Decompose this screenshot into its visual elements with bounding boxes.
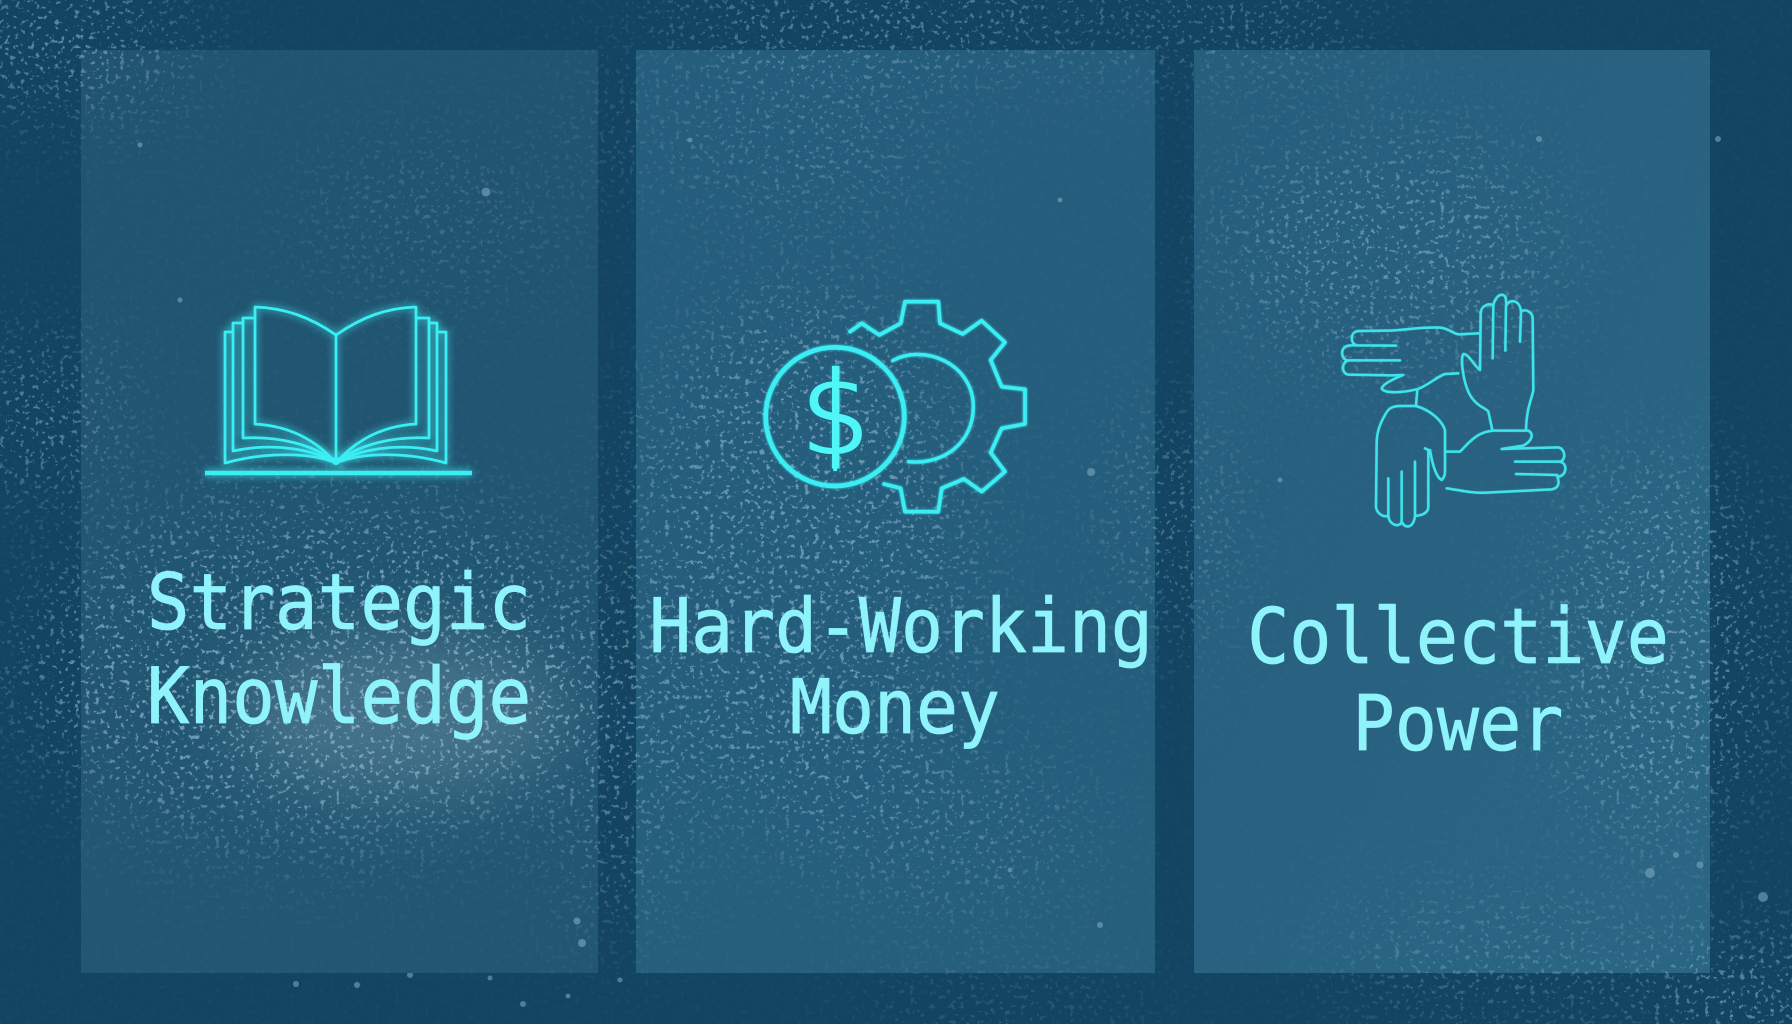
heading: Hard-Working Money [649, 584, 1153, 752]
soft cloud patch [235, 635, 565, 795]
dollar bar [825, 366, 847, 469]
panel: collective power [1194, 50, 1710, 973]
panel: hard-working money [636, 50, 1155, 973]
icon: coin and gear [766, 302, 1025, 512]
panel: strategic knowledge [81, 50, 598, 973]
heading: Collective Power: Power [1353, 680, 1563, 769]
icon: four linked hands [1342, 295, 1565, 527]
heading: Collective Power: Collective [1247, 593, 1669, 682]
heading: Strategic Knowledge: Strategic [147, 557, 531, 648]
heading: Strategic Knowledge: Knowledge [147, 651, 531, 742]
heading: Strategic Knowledge [147, 557, 531, 742]
heading: Hard-Working Money: Hard-Working [649, 584, 1153, 671]
coin ring [766, 347, 904, 486]
hand pointing left [1342, 328, 1478, 406]
hand pointing up [1462, 295, 1533, 430]
heading: Hard-Working Money: Money [790, 665, 1000, 752]
dollar sign: $ [799, 349, 872, 483]
icon: open book [205, 307, 472, 473]
hand pointing right [1445, 431, 1565, 493]
heading: Collective Power [1247, 593, 1669, 769]
hand pointing down [1376, 406, 1445, 527]
gear outline [850, 302, 1025, 512]
gear hub arc [893, 354, 973, 462]
